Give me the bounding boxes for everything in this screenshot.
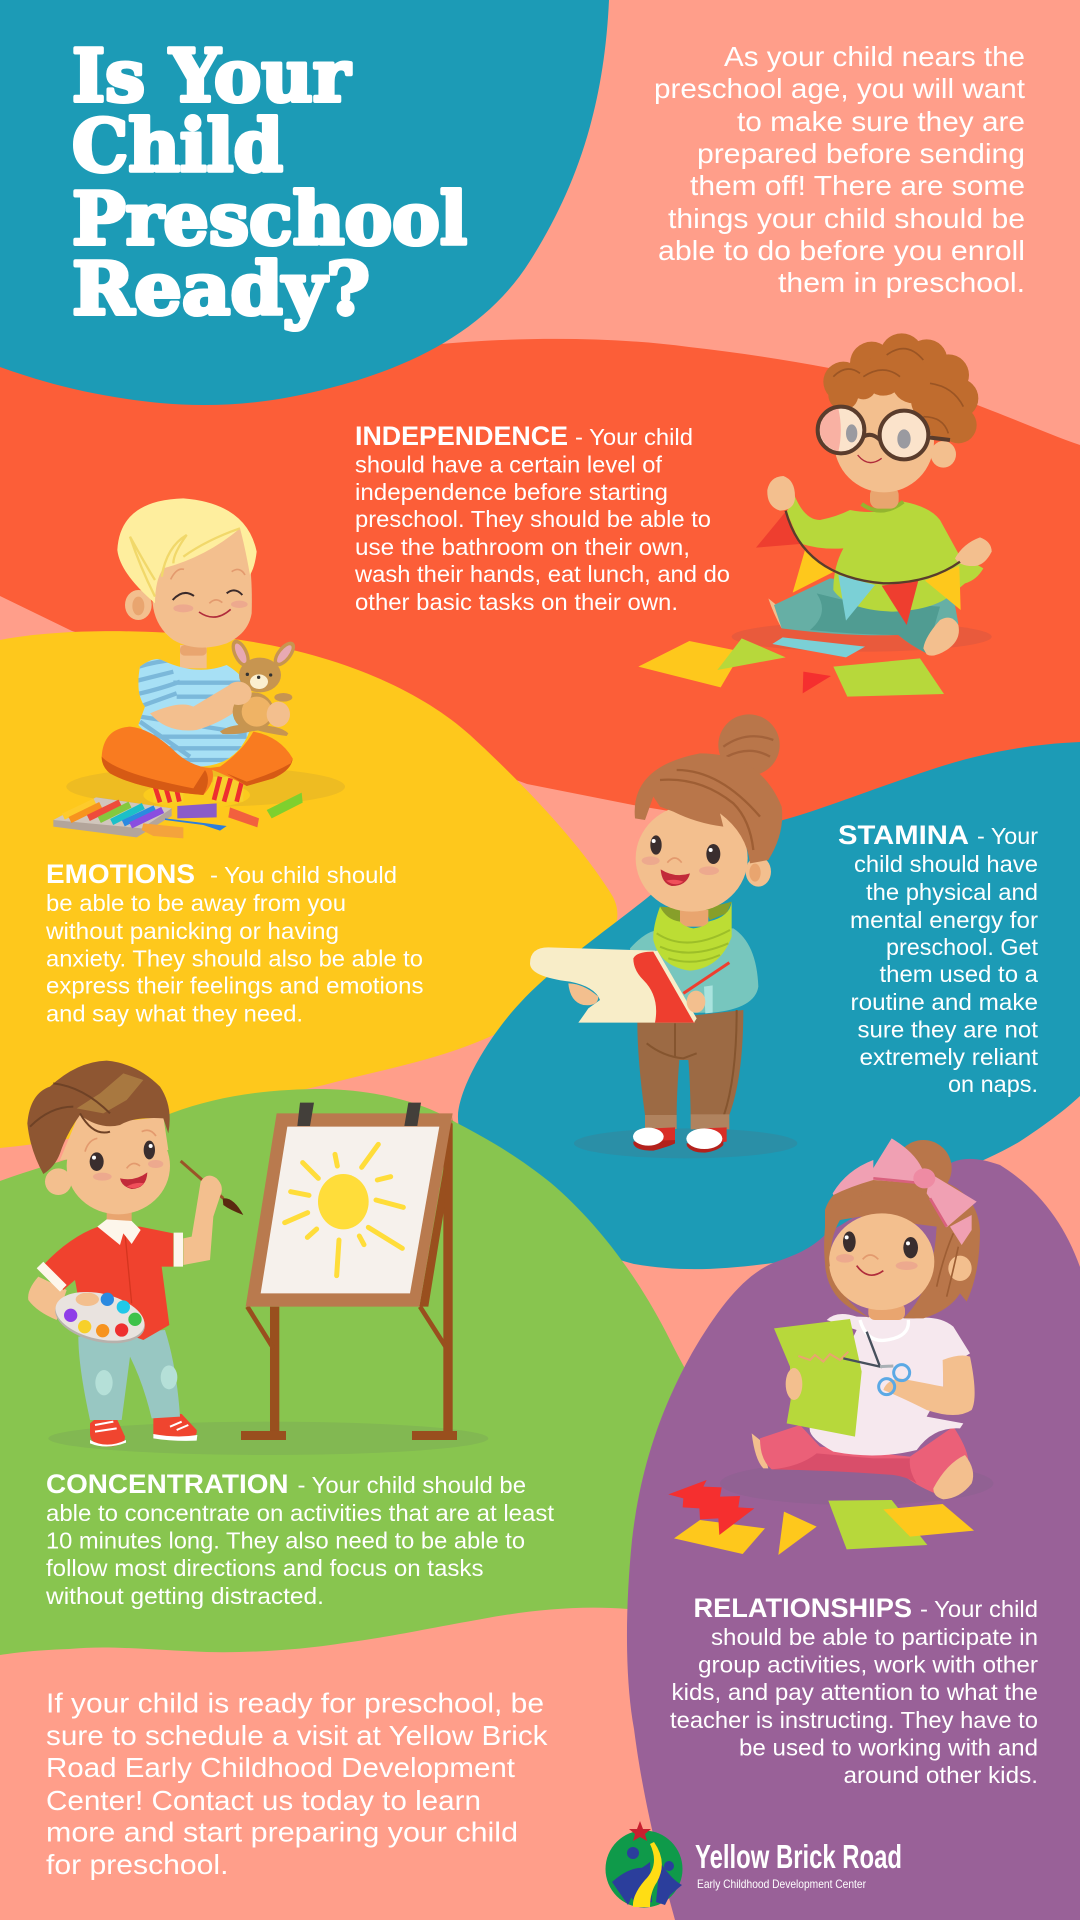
relationships text: kids, and pay attention to what the (672, 1679, 1038, 1705)
emotions text: without panicking or having (45, 918, 339, 944)
easel (241, 1103, 457, 1440)
palette (50, 1284, 150, 1351)
title: Is Your (72, 33, 351, 118)
relationships text: RELATIONSHIPS (694, 1593, 912, 1623)
closing call to action text: for preschool. (46, 1849, 228, 1880)
title: Ready? (72, 246, 370, 331)
panel: stamina teal blob (458, 742, 1080, 1269)
head (824, 1140, 980, 1318)
closing call to action text: Center! Contact us today to learn (46, 1785, 481, 1816)
illustration: boy with glasses and bunting (638, 333, 992, 697)
paper scraps (638, 637, 944, 697)
emotions text: anxiety. They should also be able to (46, 946, 423, 972)
concentration text: 10 minutes long. They also need to be able to (46, 1528, 525, 1554)
independence text: independence before starting (355, 479, 668, 505)
logo emblem (606, 1821, 682, 1908)
paper scraps (668, 1480, 974, 1555)
intro text: things your child should be (668, 203, 1025, 234)
emotions text: express their feelings and emotions (46, 972, 424, 998)
title: Preschool (72, 176, 467, 261)
pink bow (833, 1138, 977, 1245)
sun painting (285, 1144, 403, 1276)
closing call to action text: If your child is ready for preschool, be (46, 1688, 544, 1718)
intro text: preschool age, you will want (654, 73, 1025, 104)
illustration: painter boy with easel (27, 1061, 488, 1455)
independence text: other basic tasks on their own. (355, 589, 678, 615)
illustration: girl with pink bow cutting paper (668, 1138, 993, 1555)
stamina text: preschool. Get (886, 934, 1039, 960)
title: Child (72, 103, 283, 188)
panel: independence orange blob (0, 339, 1080, 830)
red shirt (43, 1227, 173, 1340)
bunting (756, 511, 961, 625)
stamina text: - Your (977, 823, 1038, 849)
stamina text: child should have (854, 851, 1038, 877)
intro text: them in preschool. (778, 267, 1025, 298)
stamina text: sure they are not (858, 1016, 1039, 1042)
shoes (633, 1127, 727, 1153)
independence text: use the bathroom on their own, (355, 534, 690, 560)
concentration text: CONCENTRATION (46, 1469, 288, 1499)
panel: concentration green blob (0, 1089, 700, 1655)
intro text: prepared before sending (697, 138, 1025, 169)
stamina text: on naps. (948, 1071, 1038, 1097)
intro text: As your child nears the (724, 41, 1025, 72)
curly hair (823, 333, 978, 443)
relationships text: teacher is instructing. They have to (670, 1707, 1038, 1733)
independence text: - Your child (575, 424, 693, 450)
relationships text: should be able to participate in (711, 1624, 1038, 1650)
glasses (818, 407, 950, 459)
emotions text: and say what they need. (46, 1000, 303, 1026)
emotions text (45, 859, 423, 1026)
bunny toy (220, 637, 299, 736)
independence text: preschool. They should be able to (355, 506, 711, 532)
closing call to action text: sure to schedule a visit at Yellow Brick (46, 1720, 548, 1751)
stamina text: STAMINA (838, 820, 969, 850)
emotions text: EMOTIONS (46, 859, 195, 889)
concentration text (45, 1469, 555, 1609)
head (27, 1061, 170, 1214)
closing call to action text (46, 1688, 548, 1880)
scissors (843, 1332, 910, 1395)
pink leggings (760, 1425, 968, 1497)
closing call to action text: Road Early Childhood Development (46, 1752, 515, 1783)
logo wordmark: Yellow Brick Road (695, 1838, 902, 1875)
stamina text: them used to a (880, 961, 1038, 987)
intro text: to make sure they are (737, 106, 1025, 137)
independence text: INDEPENDENCE (355, 421, 568, 451)
scarf (653, 902, 732, 971)
independence text (354, 421, 730, 615)
intro text (654, 41, 1025, 298)
notebook and pencil (530, 947, 729, 1023)
independence text: wash their hands, eat lunch, and do (354, 561, 730, 587)
head (117, 498, 257, 648)
stamina text: extremely reliant (860, 1044, 1039, 1070)
concentration text: follow most directions and focus on tasks (46, 1555, 484, 1581)
relationships text: - Your child (920, 1596, 1038, 1622)
white shirt (810, 1314, 970, 1455)
closing call to action text: more and start preparing your child (46, 1816, 518, 1848)
striped shirt (138, 659, 250, 766)
relationships text: be used to working with and (739, 1734, 1038, 1760)
illustration: girl with hair bun and notebook (530, 714, 797, 1158)
stamina text (838, 820, 1039, 1097)
stamina text: routine and make (850, 989, 1038, 1015)
intro text: able to do before you enroll (658, 235, 1025, 266)
stamina text: the physical and (866, 879, 1038, 905)
crossed legs (102, 727, 293, 802)
emotions text: be able to be away from you (46, 890, 346, 916)
sweater (630, 928, 758, 1013)
concentration text: - Your child should be (298, 1472, 526, 1498)
trousers (637, 1010, 743, 1115)
illustration: blond boy with bunny and clay (53, 498, 345, 838)
stamina text: mental energy for (850, 907, 1038, 933)
emotions text: - You child should (210, 862, 397, 888)
panel: title teal blob (0, 0, 609, 405)
concentration text: without getting distracted. (45, 1583, 324, 1609)
logo: Yellow Brick Road (606, 1821, 902, 1908)
clay tray and pieces (53, 793, 303, 838)
title (72, 33, 467, 331)
relationships text (670, 1593, 1038, 1788)
relationships text: around other kids. (844, 1762, 1038, 1788)
green paper (774, 1319, 862, 1437)
panel: emotions yellow blob (0, 631, 617, 1148)
head (635, 714, 782, 912)
independence text: should have a certain level of (355, 452, 663, 478)
sneakers (90, 1413, 197, 1447)
relationships text: group activities, work with other (698, 1652, 1038, 1678)
intro text: them off! There are some (690, 170, 1025, 201)
concentration text: able to concentrate on activities that are at least (46, 1500, 555, 1526)
panel: relationships purple blob (627, 1159, 1080, 1920)
logo tagline: Early Childhood Development Center (697, 1877, 866, 1891)
